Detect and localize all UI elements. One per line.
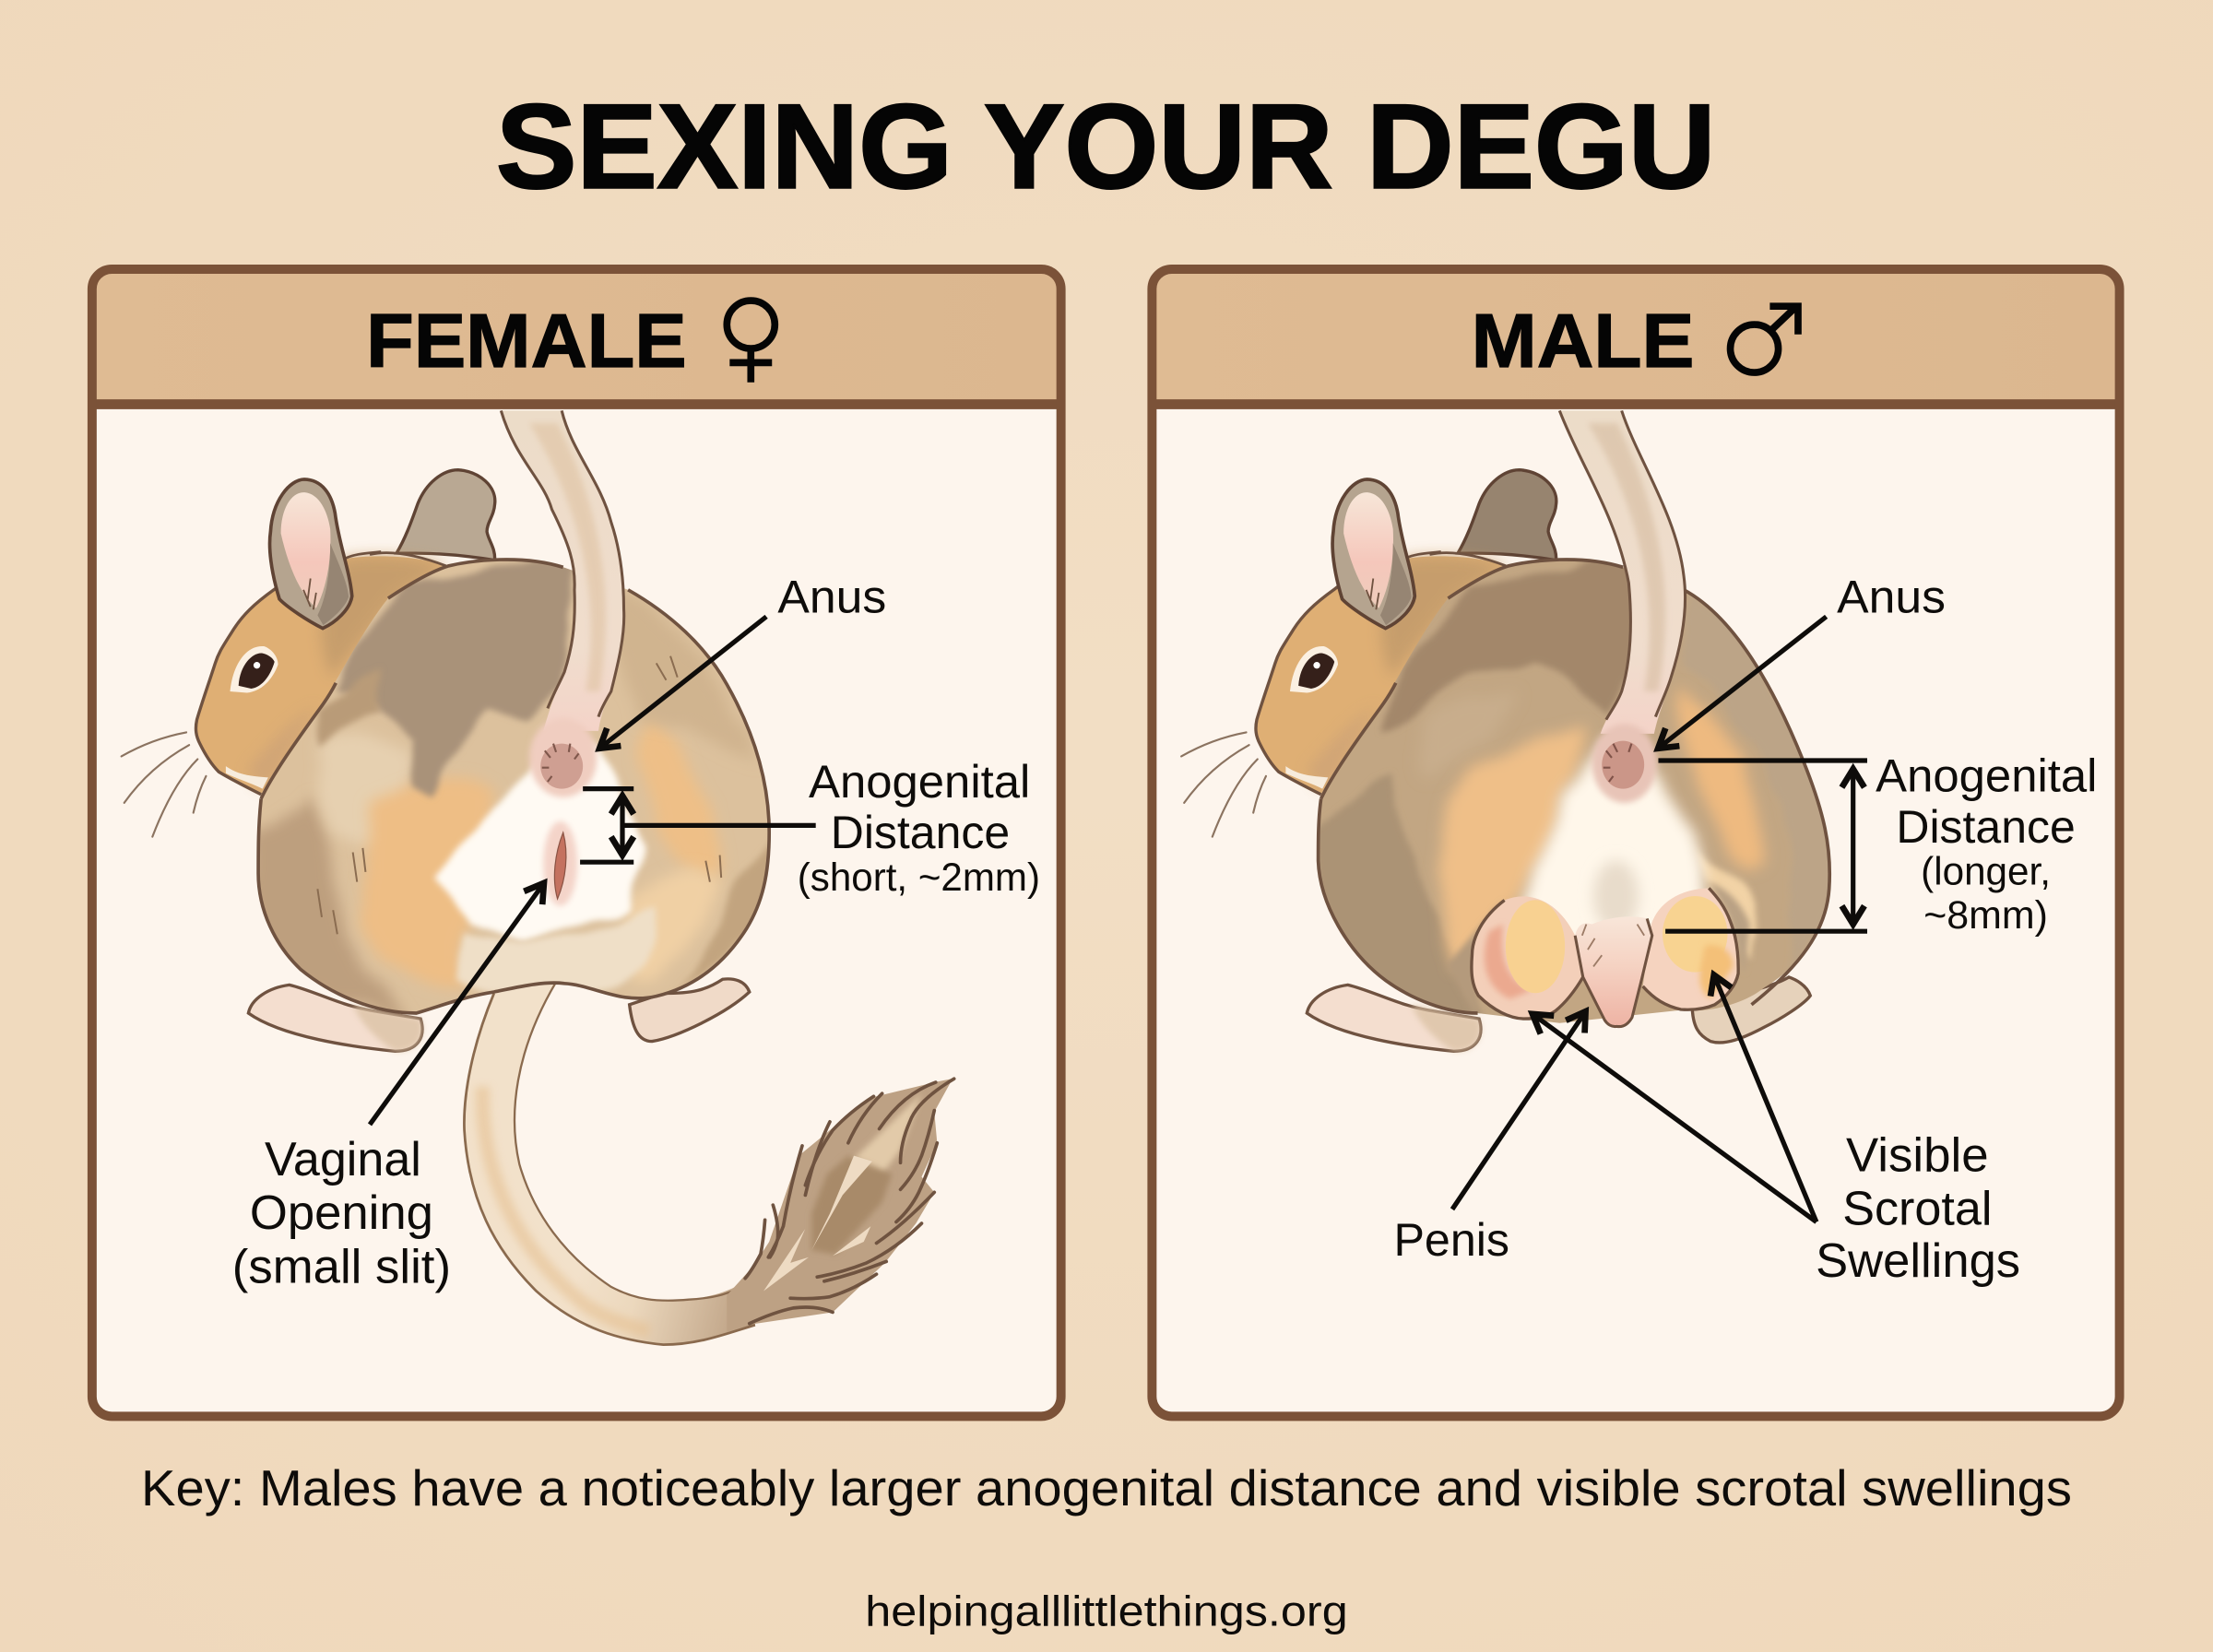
panel border <box>1152 269 2120 1416</box>
label: scrotal swellings: Visible <box>1846 1128 1989 1182</box>
heading: male: MALE <box>1472 298 1695 384</box>
panel: male <box>1152 269 2120 1416</box>
body watercolor washes <box>1320 562 1770 1014</box>
measure: anogenital distance <box>580 789 816 862</box>
upper tail <box>501 410 624 731</box>
website footer: helpingalllittlethings.org <box>865 1587 1348 1634</box>
illustration: female degu <box>122 410 954 1345</box>
body outline <box>258 560 769 1013</box>
scrotal swellings <box>1472 888 1738 1019</box>
label: penis: Penis <box>1393 1213 1509 1266</box>
label: anogenital distance: Distance <box>831 806 1010 858</box>
panel frame <box>1152 269 2120 1416</box>
panel: female <box>91 269 1061 1416</box>
label: vaginal opening: Opening <box>250 1186 433 1240</box>
label: vaginal opening <box>232 1133 451 1293</box>
body <box>1319 560 1829 1023</box>
panel header <box>1152 269 2120 409</box>
illustration: male degu <box>1181 410 1832 1051</box>
penis <box>1575 916 1652 1027</box>
label: vaginal opening: Vaginal <box>265 1133 421 1186</box>
label: scrotal swellings <box>1816 1128 2020 1288</box>
far ear <box>396 470 495 560</box>
arrow: anus <box>598 617 766 749</box>
body outline <box>1319 560 1829 1013</box>
far ear <box>1458 470 1556 560</box>
anus <box>1592 724 1657 803</box>
label: anogenital distance <box>1876 749 2097 938</box>
right foot <box>1692 977 1810 1043</box>
panel header <box>91 269 1061 409</box>
body <box>258 560 769 1013</box>
key note: Key: Males have a noticeably larger anogenital distance and visible scrotal swellings <box>141 1459 2072 1516</box>
label: anogenital distance: Distance <box>1896 800 2076 853</box>
lower tail <box>464 982 954 1345</box>
label: anus: Anus <box>777 570 886 622</box>
anus <box>529 718 597 797</box>
arrow: anus <box>1657 617 1827 749</box>
heading: female: FEMALE <box>366 298 687 384</box>
label: scrotal swellings: Swellings <box>1816 1234 2020 1288</box>
label: anogenital distance: Anogenital <box>809 755 1030 808</box>
label: scrotal swellings: Scrotal <box>1842 1183 1992 1236</box>
label: anogenital distance: ~8mm) <box>1923 893 2048 938</box>
arrow: penis <box>1452 1010 1586 1210</box>
label: anogenital distance <box>798 755 1040 900</box>
label: anus: Anus <box>1837 570 1946 622</box>
title: SEXING YOUR DEGU <box>496 79 1715 214</box>
tail tuft <box>727 1079 954 1332</box>
icon: male symbol <box>1731 306 1798 372</box>
panel border <box>92 269 1061 1416</box>
label: anogenital distance: (short, ~2mm) <box>798 856 1040 900</box>
panel frame <box>92 269 1061 1416</box>
icon: female symbol <box>727 301 775 383</box>
vaginal opening <box>543 821 577 906</box>
measure: anogenital distance <box>1658 761 1867 931</box>
upper tail <box>1559 410 1686 734</box>
body watercolor washes <box>247 559 779 1023</box>
label: anogenital distance: (longer, <box>1921 850 2051 894</box>
arrow: vaginal opening <box>370 882 545 1125</box>
arrows: scrotal swellings <box>1532 974 1817 1222</box>
fur ticks <box>317 656 721 934</box>
label: vaginal opening: (small slit) <box>232 1240 451 1293</box>
label: anogenital distance: Anogenital <box>1876 749 2097 802</box>
